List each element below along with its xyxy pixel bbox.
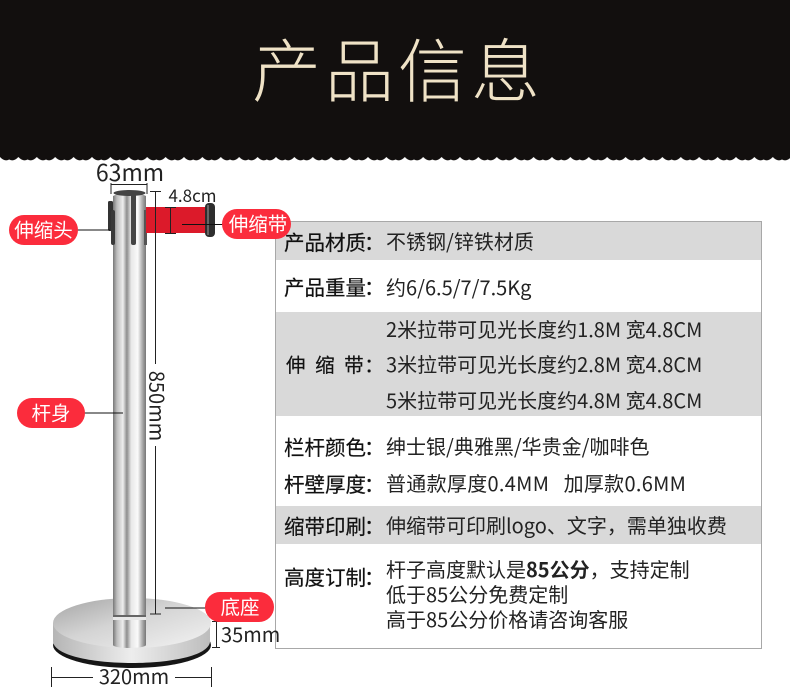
- title: 产品信息: [252, 16, 544, 116]
- base: [53, 598, 211, 668]
- dimension: 35mm: 35mm: [221, 619, 280, 648]
- label: belt: 伸 缩 带：: [286, 349, 386, 378]
- callout: 底座: [165, 591, 274, 622]
- pole: [113, 196, 146, 648]
- value: colour: 绅士银/典雅黑/华贵金/咖啡色: [386, 431, 650, 460]
- height line 3: 高于85公分价格请咨询客服: [386, 604, 628, 633]
- callout: 伸缩带: [182, 208, 291, 239]
- callout: 杆身: 杆身: [31, 397, 71, 426]
- value: printing: 伸缩带可印刷logo、文字，需单独收费: [386, 510, 727, 539]
- label: wall thickness: 杆壁厚度：: [284, 468, 384, 498]
- value: wall thickness: 普通款厚度0.4MM 加厚款0.6MM: [386, 468, 686, 497]
- label: colour: 栏杆颜色：: [284, 431, 384, 461]
- height line 2: 低于85公分免费定制: [386, 579, 568, 608]
- label: material: 产品材质：: [284, 226, 384, 256]
- belt line 3: 5米拉带可见光长度约4.8M 宽4.8CM: [386, 385, 702, 414]
- dimension: 320mm: [52, 661, 212, 690]
- dimension: 320mm: 320mm: [99, 661, 169, 690]
- label: height: 高度订制：: [284, 561, 384, 591]
- callout: 杆身: [17, 397, 123, 428]
- header banner: [0, 0, 790, 160]
- retractable head: [108, 190, 147, 245]
- spec table: [275, 221, 762, 649]
- dimension: 850mm: [144, 192, 172, 614]
- label: weight: 产品重量：: [284, 271, 384, 301]
- stanchion diagram: [9, 154, 291, 690]
- belt line 1: 2米拉带可见光长度约1.8M 宽4.8CM: [386, 314, 702, 343]
- callout: 伸缩带: 伸缩带: [229, 208, 287, 237]
- row band: belt: [276, 312, 761, 416]
- dimension: 850mm: 850mm: [144, 371, 172, 441]
- label: printing: 缩带印刷：: [284, 510, 384, 540]
- callout: 伸缩头: [9, 214, 110, 245]
- red belt: [146, 203, 215, 237]
- dimension: 63mm: 63mm: [96, 154, 164, 188]
- dimension: 4.8cm: [165, 182, 217, 234]
- callout: 底座: 底座: [220, 591, 260, 620]
- callout: 伸缩头: 伸缩头: [14, 214, 73, 243]
- value: weight: 约6/6.5/7/7.5Kg: [386, 272, 531, 301]
- row band: printing: [276, 506, 761, 544]
- row band: material: [276, 222, 761, 260]
- height line 1: 杆子高度默认是85公分，支持定制: [386, 554, 690, 583]
- value: material: 不锈钢/锌铁材质: [386, 226, 534, 255]
- belt line 2: 3米拉带可见光长度约2.8M 宽4.8CM: [386, 349, 702, 378]
- dimension: 4.8cm: 4.8cm: [168, 182, 217, 207]
